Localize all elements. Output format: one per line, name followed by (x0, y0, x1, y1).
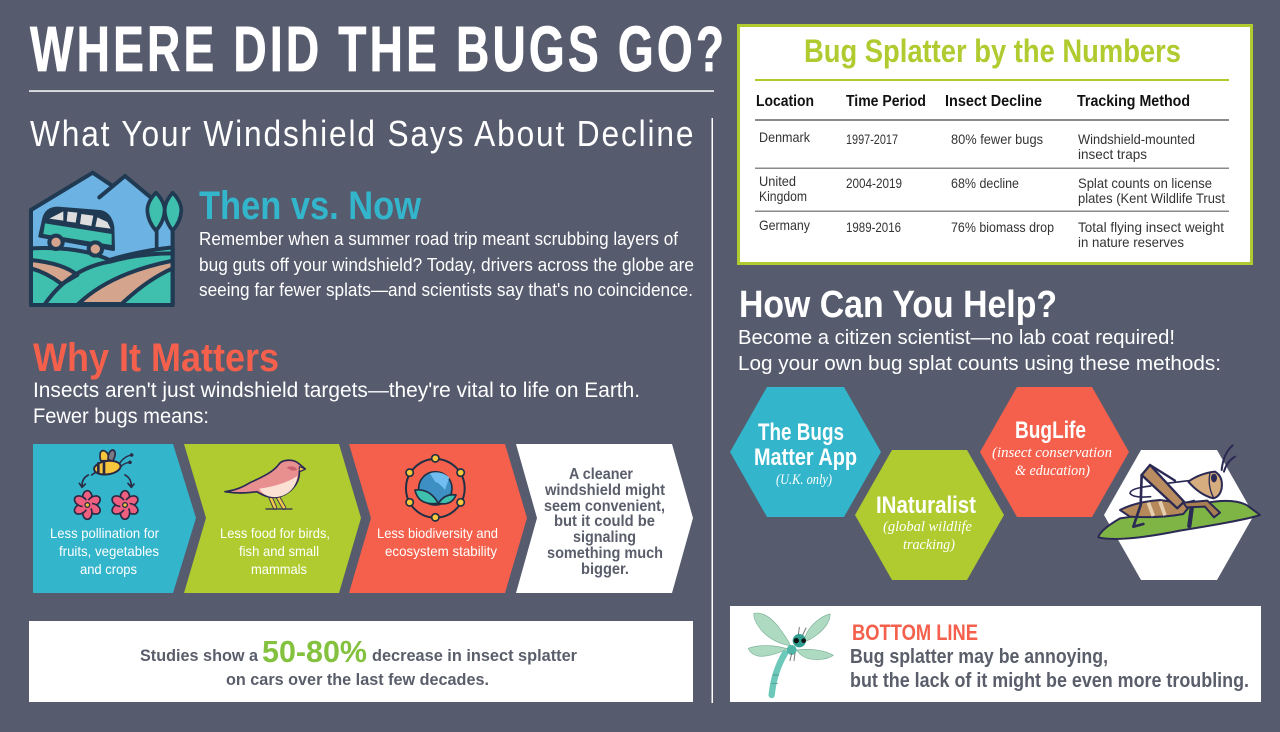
text block: why it matters: Insects aren't just windshield targets—they're vital to life on Earth. (33, 379, 640, 402)
table row: Germany: Total flying insect weight (1078, 219, 1224, 235)
table row: United Kingdom: 2004-2019 (846, 175, 902, 191)
panel: biodiversity chevron (349, 444, 527, 593)
table row: United Kingdom: Kingdom (759, 188, 807, 204)
text block: then vs now: seeing far fewer splats—and scientists say that's no coincidence. (199, 280, 693, 300)
hexagon: INaturalist (855, 450, 1004, 580)
icon: bus on hills (31, 173, 181, 305)
callout: studies show: Studies show a (140, 646, 259, 665)
label: pollination: fruits, vegetables (59, 543, 159, 559)
table header row: Time Period (846, 93, 926, 110)
panel: cleaner windshield chevron: but it could be (554, 513, 655, 530)
text block: then vs now: bug guts off your windshield? Today, drivers across the globe are (199, 255, 694, 275)
icon: grasshopper on leaf (1098, 445, 1260, 539)
table header row: Tracking Method (1077, 93, 1190, 110)
label: pollination (50, 525, 159, 577)
table header row: Insect Decline (945, 93, 1042, 110)
panel: cleaner windshield chevron: seem convenient, (544, 498, 665, 515)
callout: studies show: decrease in insect splatter (372, 646, 577, 665)
text block: why it matters (33, 379, 640, 428)
icon: bird (225, 460, 305, 509)
table row: United Kingdom (759, 173, 1225, 206)
table row: United Kingdom: Splat counts on license (1078, 175, 1212, 191)
panel: cleaner windshield chevron: signaling (573, 529, 636, 546)
hexagon: INaturalist: (global wildlife (883, 519, 972, 535)
hexagon: The Bugs Matter App: (U.K. only) (776, 472, 832, 488)
label: pollination: and crops (80, 561, 137, 577)
hexagon: INaturalist: tracking) (903, 537, 955, 553)
table row: Germany: 76% biomass drop (951, 219, 1054, 235)
icon: globe with leaves (406, 455, 465, 521)
table row: Germany: in nature reserves (1078, 234, 1184, 250)
table heading: Bug Splatter by the Numbers (804, 33, 1181, 69)
label: biodiversity: Less biodiversity and (377, 525, 498, 541)
table row: Denmark (759, 129, 1195, 162)
text block: why it matters: Fewer bugs means: (33, 405, 209, 428)
table row: United Kingdom: United (759, 173, 796, 189)
table row: Germany (759, 217, 1224, 250)
text block: how can you help: Become a citizen scientist—no lab coat required! (738, 327, 1175, 349)
hexagon: BugLife: & education) (1015, 463, 1090, 479)
label: food: Less food for birds, (220, 525, 330, 541)
panel: cleaner windshield chevron: A cleaner (569, 466, 633, 483)
label: pollination: Less pollination for (50, 525, 159, 541)
hexagon: grasshopper (1098, 445, 1260, 580)
hexagon: The Bugs Matter App: Matter App (754, 444, 857, 471)
text block: how can you help (738, 327, 1221, 375)
text block: then vs now: Remember when a summer road trip meant scrubbing layers of (199, 229, 679, 249)
table row: United Kingdom: plates (Kent Wildlife Trust (1078, 190, 1225, 206)
callout: studies show (29, 621, 693, 702)
icon: bee and flowers (73, 450, 140, 519)
heading: then vs now: Then vs. Now (199, 184, 422, 228)
panel: bug splatter table (738, 26, 1252, 264)
callout: studies show: on cars over the last few decades. (226, 670, 489, 689)
hexagon: The Bugs Matter App: The Bugs (758, 419, 844, 446)
panel: food chevron (184, 444, 361, 593)
panel: cleaner windshield chevron (516, 444, 693, 593)
hexagon: The Bugs Matter App (730, 387, 881, 517)
callout: studies show: 50-80% (262, 634, 367, 669)
callout: bottom line: Bug splatter may be annoying, (850, 646, 1108, 668)
table row: Denmark: Denmark (759, 129, 811, 145)
table row: Denmark: 1997-2017 (846, 131, 898, 147)
panel: pollination chevron (33, 444, 196, 593)
table row: United Kingdom: 68% decline (951, 175, 1019, 191)
text block: how can you help: Log your own bug splat counts using these methods: (738, 353, 1221, 375)
heading: how can you help: How Can You Help? (739, 284, 1057, 326)
subtitle: What Your Windshield Says About Decline (30, 114, 694, 154)
hexagon: BugLife: BugLife (1015, 417, 1086, 444)
title: WHERE DID THE BUGS GO? (30, 14, 724, 85)
panel: cleaner windshield chevron: something much (547, 545, 663, 562)
panel: cleaner windshield chevron: windshield might (544, 482, 666, 499)
table row: Germany: 1989-2016 (846, 219, 901, 235)
table row: Denmark: Windshield-mounted (1078, 131, 1195, 147)
table row: Germany: Germany (759, 217, 810, 233)
hexagon: INaturalist: INaturalist (876, 492, 976, 519)
table header row (756, 93, 1190, 110)
panel: cleaner windshield chevron: bigger. (581, 561, 629, 578)
hexagon: BugLife: (insect conservation (992, 445, 1112, 461)
table row: Denmark: 80% fewer bugs (951, 131, 1043, 147)
hexagon: BugLife (980, 387, 1129, 517)
label: biodiversity: ecosystem stability (385, 543, 497, 559)
table row: Denmark: insect traps (1078, 146, 1147, 162)
label: food (220, 525, 330, 577)
label: food: mammals (251, 561, 307, 577)
callout: bottom line (730, 606, 1261, 702)
icon: dragonfly (748, 613, 833, 695)
label: food: fish and small (239, 543, 319, 559)
table header row: Location (756, 93, 814, 110)
text block: then vs now (199, 229, 694, 300)
heading: why it matters: Why It Matters (33, 336, 279, 380)
callout: bottom line: BOTTOM LINE (852, 620, 978, 645)
label: biodiversity (377, 525, 498, 559)
